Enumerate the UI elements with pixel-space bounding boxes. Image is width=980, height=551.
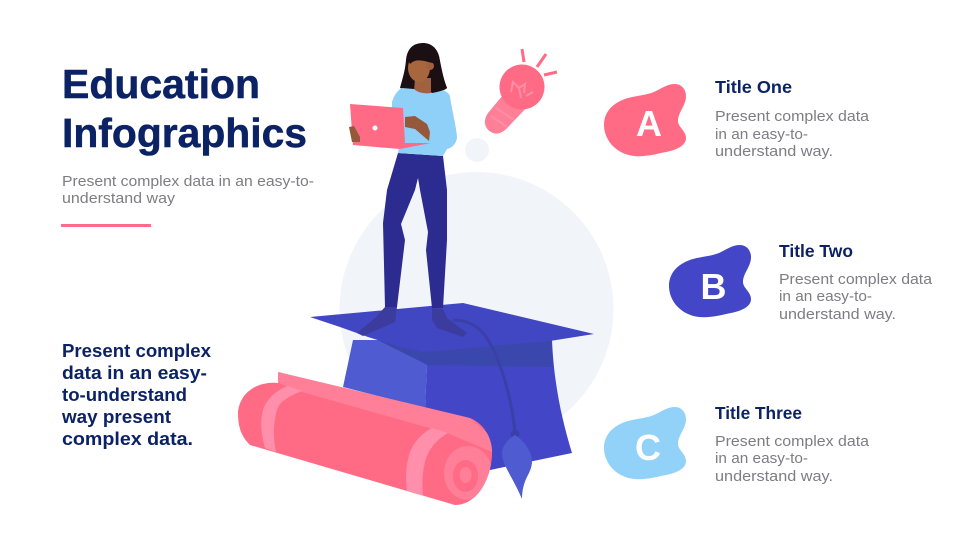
- bold statement: complex data.: [62, 428, 193, 449]
- item A: Title One: Title One: [715, 77, 792, 97]
- item C: Title Three: in an easy-to-: [715, 450, 808, 467]
- item B: Title Two: B: [700, 266, 726, 307]
- bold statement: way present: [61, 406, 171, 427]
- hair back: [400, 43, 447, 93]
- item C: Title Three: Present complex data: [715, 433, 870, 450]
- item B: Title Two: Title Two: [779, 241, 853, 261]
- title: [62, 61, 307, 156]
- item B: Title Two: Present complex data: [779, 271, 933, 288]
- sweater: [392, 88, 457, 156]
- forearm and hand: [405, 116, 430, 141]
- person with laptop: [349, 43, 467, 337]
- graduation cap: [310, 303, 594, 499]
- blob C: [604, 407, 686, 479]
- item A: Title One: understand way.: [715, 143, 833, 160]
- title: Infographics: [62, 110, 307, 156]
- item A: Title One: A: [636, 103, 662, 144]
- item A: Title One: [604, 77, 870, 160]
- title: Education: [62, 61, 260, 107]
- item B: Title Two: understand way.: [779, 306, 896, 323]
- item B: Title Two: in an easy-to-: [779, 288, 872, 305]
- bold statement: [61, 340, 212, 449]
- laptop: [350, 104, 431, 149]
- blob B: [669, 245, 751, 317]
- hair front lock: [431, 56, 447, 93]
- item A: Title One: in an easy-to-: [715, 126, 808, 143]
- bold statement: to-understand: [62, 384, 187, 405]
- bold statement: Present complex: [62, 340, 212, 361]
- icon: light bulb: [485, 49, 557, 134]
- background circle: [340, 172, 614, 446]
- scroll: [238, 372, 495, 505]
- face: [408, 48, 436, 82]
- tassel: [502, 435, 532, 499]
- blob A: [604, 84, 686, 156]
- subtitle: understand way: [62, 190, 176, 207]
- item B: Title Two: [669, 241, 933, 323]
- left hand: [349, 126, 360, 142]
- item C: Title Three: understand way.: [715, 468, 833, 485]
- subtitle: [62, 173, 314, 207]
- thought bubble: [465, 138, 489, 162]
- accent rule: [61, 224, 151, 227]
- neck: [414, 78, 431, 96]
- item C: Title Three: C: [635, 427, 661, 468]
- item C: Title Three: Title Three: [715, 403, 802, 423]
- item C: Title Three: [604, 403, 870, 485]
- subtitle: Present complex data in an easy-to-: [62, 173, 314, 190]
- infographic canvas: [61, 43, 932, 505]
- trousers: [383, 153, 447, 308]
- bold statement: data in an easy-: [62, 362, 207, 383]
- feet: [357, 307, 467, 337]
- item A: Title One: Present complex data: [715, 108, 870, 125]
